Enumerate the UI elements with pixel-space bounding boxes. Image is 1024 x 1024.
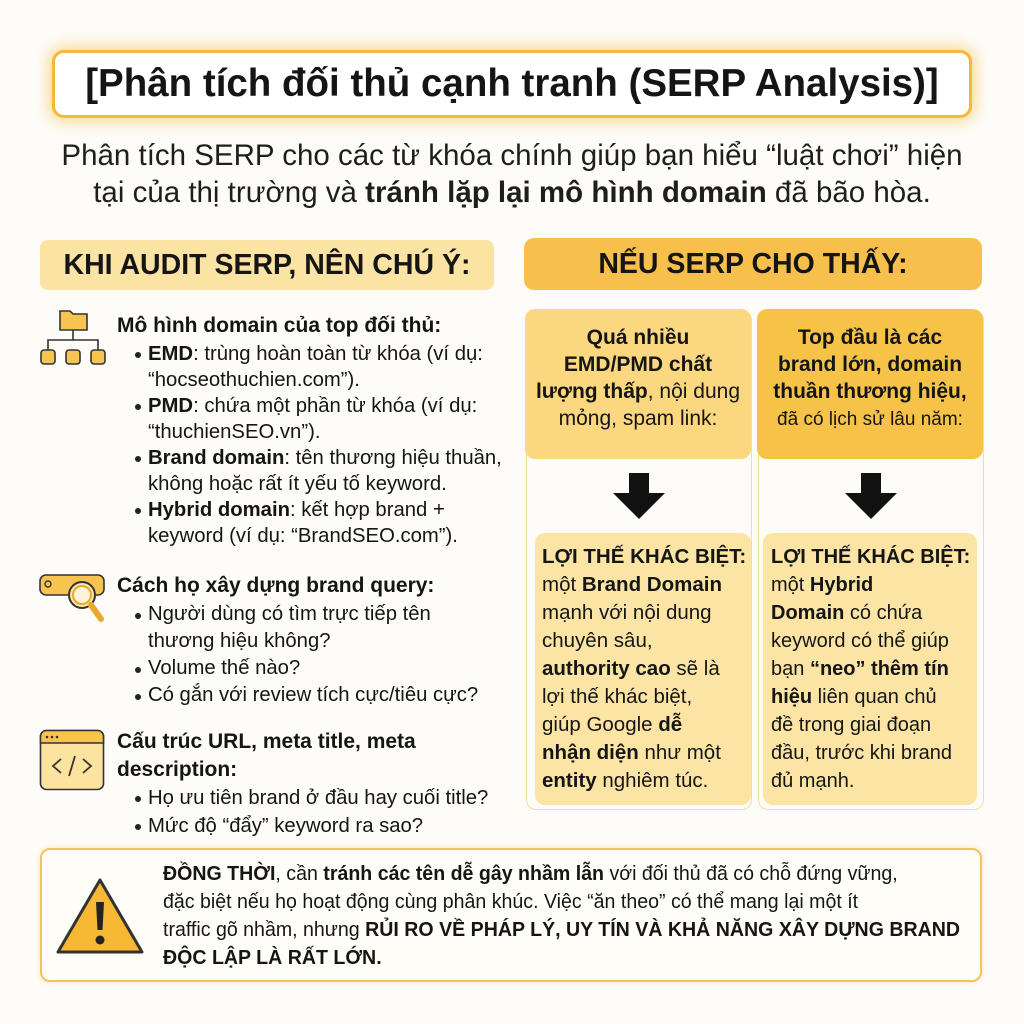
result box left	[535, 533, 751, 805]
section: brand query: Người dùng có tìm trực tiếp tên	[148, 603, 431, 625]
column left: low quality EMD: giúp Google dễ	[542, 713, 682, 736]
title: [Phân tích đối thủ cạnh tranh (SERP Analysis)]	[85, 62, 939, 105]
subtitle	[61, 139, 963, 209]
section: URL meta: Họ ưu tiên brand ở đầu hay cuối title?	[148, 787, 488, 809]
section: URL meta: description:	[117, 758, 237, 781]
right header	[524, 238, 982, 290]
warning box	[40, 848, 982, 982]
section: domain models: không hoặc rất ít yếu tố keyword.	[148, 473, 447, 495]
column right: big brands: Domain có chứa	[771, 602, 922, 624]
column right: big brands: hiệu liên quan chủ	[771, 686, 937, 708]
subtitle: Phân tích SERP cho các từ khóa chính giúp bạn hiểu “luật chơi” hiện	[61, 139, 963, 172]
section: URL meta: Mức độ “đẩy” keyword ra sao?	[148, 815, 423, 837]
condition box right: Top đầu là các	[798, 326, 942, 349]
result box right	[763, 533, 977, 805]
arrow right	[845, 473, 897, 519]
icon: search bar magnifier	[39, 574, 105, 622]
condition box left: EMD/PMD chất	[564, 353, 712, 376]
condition box right: đã có lịch sử lâu năm:	[777, 409, 963, 430]
section: domain models: “hocseothuchien.com”).	[148, 369, 360, 391]
condition box left	[525, 309, 751, 459]
section: domain models: “thuchienSEO.vn”).	[148, 421, 320, 443]
warning text	[163, 862, 960, 969]
column right: big brands: keyword có thể giúp	[771, 630, 949, 652]
condition box left: Quá nhiều	[587, 326, 689, 349]
condition box left: mỏng, spam link:	[559, 407, 717, 430]
icon: sitemap folder	[40, 310, 106, 365]
section: URL meta: Cấu trúc URL, meta title, meta	[117, 730, 416, 753]
section: brand query: Cách họ xây dựng brand query:	[117, 574, 434, 597]
column left: low quality EMD: entity nghiêm túc.	[542, 769, 708, 792]
column left: low quality EMD: chuyên sâu,	[542, 629, 653, 652]
arrow left	[613, 473, 665, 519]
column right: big brands: bạn “neo” thêm tín	[771, 658, 949, 680]
condition box left: lượng thấp, nội dung	[536, 380, 740, 403]
column left: low quality EMD: mạnh với nội dung	[542, 601, 712, 624]
section: brand query: thương hiệu không?	[148, 630, 331, 652]
column left: low quality EMD: authority cao sẽ là	[542, 657, 720, 680]
column right: big brands: đề trong giai đoạn	[771, 714, 931, 736]
column left: low quality EMD: lợi thế khác biệt,	[542, 685, 692, 708]
section: brand query: Volume thế nào?	[148, 657, 300, 679]
column left: low quality EMD: nhận diện như một	[542, 741, 721, 764]
section: domain models: keyword (ví dụ: “BrandSEO.com”).	[148, 525, 458, 547]
column left: low quality EMD	[526, 310, 752, 810]
section: domain models	[117, 314, 502, 547]
section: domain models: Hybrid domain: kết hợp brand +	[148, 499, 445, 521]
icon: code window	[40, 730, 104, 790]
column right: big brands: LỢI THẾ KHÁC BIỆT:	[771, 546, 970, 568]
warning text: ĐỘC LẬP LÀ RẤT LỚN.	[163, 946, 382, 969]
section: domain models: EMD: trùng hoàn toàn từ khóa (ví dụ:	[148, 343, 483, 365]
subtitle: tại của thị trường và tránh lặp lại mô hình domain đã bão hòa.	[93, 176, 931, 209]
condition box right: thuần thương hiệu,	[773, 380, 967, 403]
column left: low quality EMD: LỢI THẾ KHÁC BIỆT:	[542, 545, 746, 568]
right header: NẾU SERP CHO THẤY:	[598, 248, 908, 280]
section: URL meta	[117, 730, 488, 837]
section: brand query: Có gắn với review tích cực/tiêu cực?	[148, 684, 478, 706]
column right: big brands	[758, 310, 984, 810]
section: brand query	[117, 574, 478, 706]
warning text: traffic gõ nhầm, nhưng RỦI RO VỀ PHÁP LÝ, UY TÍN VÀ KHẢ NĂNG XÂY DỰNG BRAND	[163, 918, 960, 941]
icon: warning triangle	[56, 878, 144, 954]
column right: big brands: đủ mạnh.	[771, 770, 854, 792]
section: domain models: Mô hình domain của top đối thủ:	[117, 314, 441, 337]
column right: big brands: một Hybrid	[771, 574, 873, 596]
warning text: ĐỒNG THỜI, cần tránh các tên dễ gây nhầm lẫn với đối thủ đã có chỗ đứng vững,	[163, 862, 898, 885]
condition box right: brand lớn, domain	[778, 353, 962, 376]
column left: low quality EMD: một Brand Domain	[542, 573, 722, 596]
title	[52, 50, 972, 118]
condition box right	[757, 309, 983, 459]
left header: KHI AUDIT SERP, NÊN CHÚ Ý:	[64, 249, 470, 281]
column right: big brands: đầu, trước khi brand	[771, 742, 952, 764]
section: domain models: Brand domain: tên thương hiệu thuần,	[148, 447, 502, 469]
section: domain models: PMD: chứa một phần từ khóa (ví dụ:	[148, 395, 477, 417]
warning text: đặc biệt nếu họ hoạt động cùng phân khúc. Việc “ăn theo” có thể mang lại một ít	[163, 890, 858, 913]
left header	[40, 240, 494, 290]
